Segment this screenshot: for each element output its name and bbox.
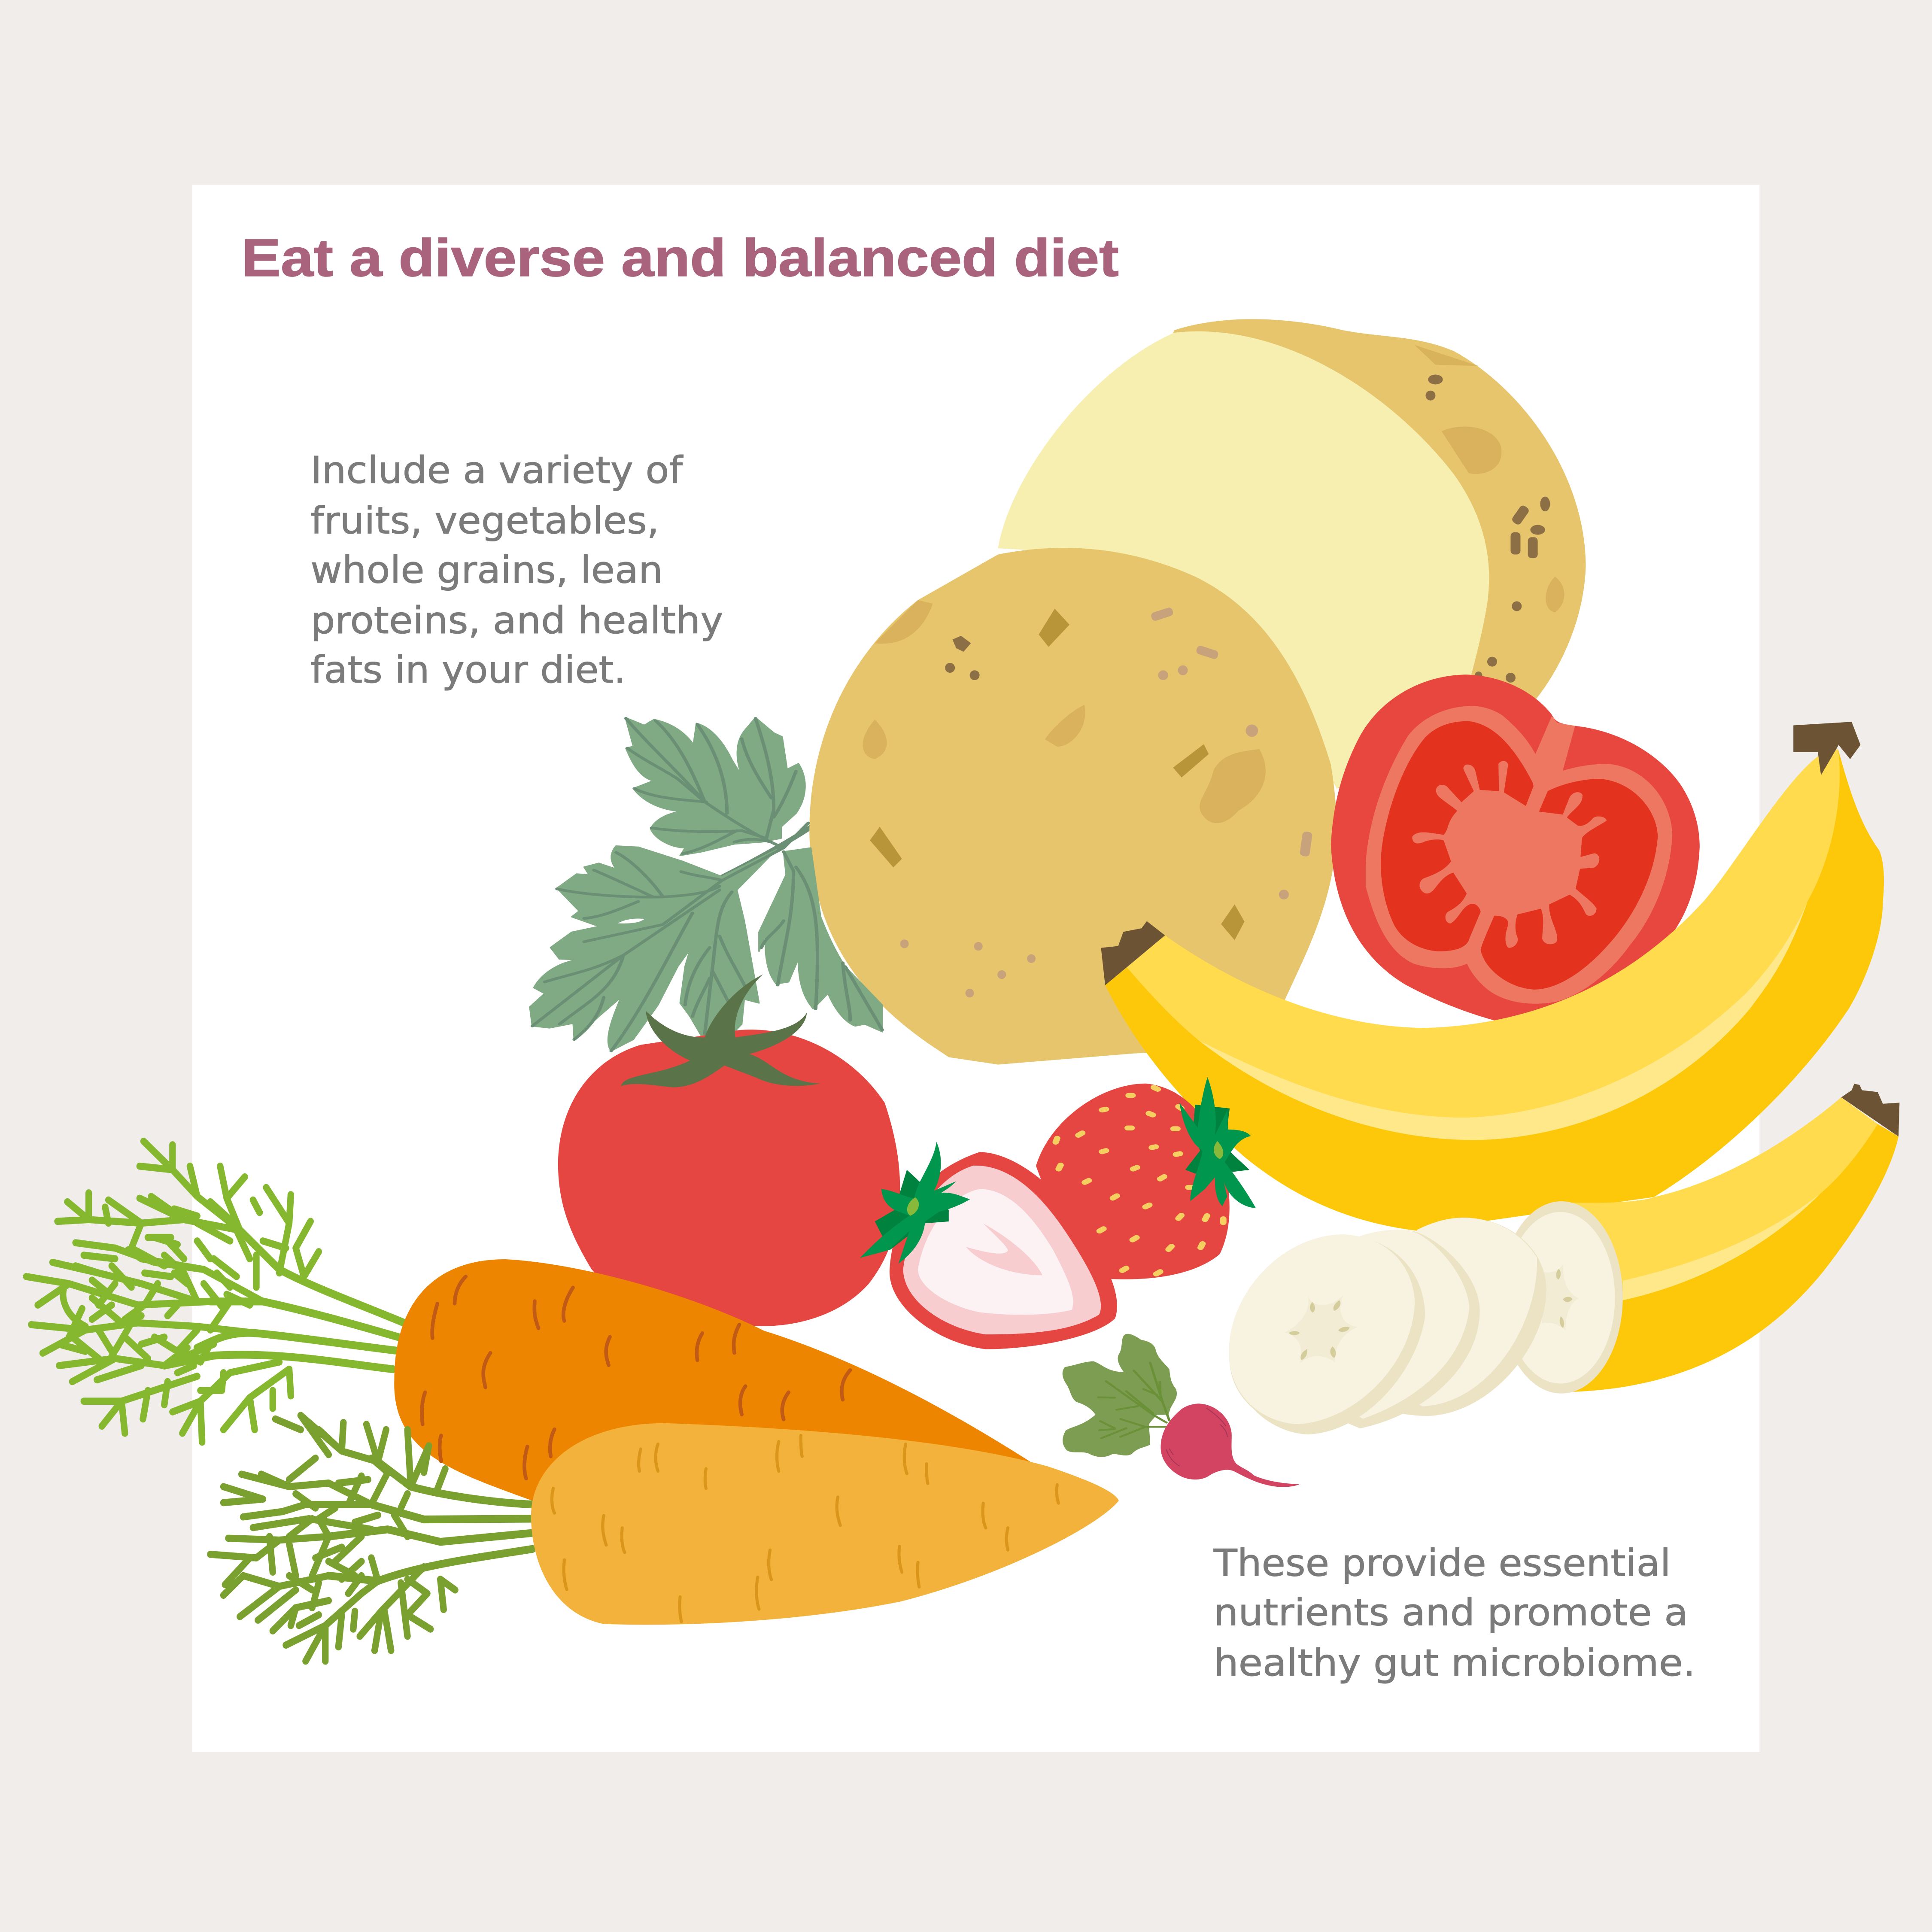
- icon: whole tomato: [558, 974, 900, 1326]
- icon: lower banana: [1565, 1084, 1899, 1392]
- text block: essential nutrients: healthy gut microbiome.: [1214, 1642, 1695, 1685]
- icon: parsley stem: [690, 826, 813, 893]
- icon: large banana: [1101, 722, 1884, 1231]
- text block: variety of foods: proteins, and healthy: [310, 599, 723, 642]
- icon: lower carrot: [531, 1423, 1119, 1625]
- text block: essential nutrients: These provide essential: [1213, 1542, 1671, 1585]
- icon: radish: [1063, 1334, 1300, 1487]
- icon: back potato: [998, 319, 1586, 789]
- text block: variety of foods: fruits, vegetables,: [310, 500, 659, 543]
- title: Eat a diverse and balanced diet: [242, 228, 1119, 288]
- icon: front potato: [809, 548, 1337, 1065]
- text block: variety of foods: Include a variety of: [310, 449, 683, 492]
- icon: parsley leaves: [530, 717, 882, 1051]
- icon: banana slices: [1229, 1201, 1623, 1434]
- icon: top carrot: [394, 1259, 1041, 1501]
- text block: variety of foods: whole grains, lean: [310, 549, 663, 592]
- icon: top carrot greens: [26, 1141, 406, 1442]
- text block: essential nutrients: [1213, 1542, 1695, 1685]
- text block: variety of foods: [310, 449, 723, 692]
- icon: back strawberry: [1036, 1077, 1256, 1279]
- icon: lower carrot greens: [210, 1416, 532, 1661]
- icon: cut strawberry: [860, 1142, 1117, 1349]
- text block: essential nutrients: nutrients and promote a: [1214, 1591, 1688, 1634]
- text block: variety of foods: fats in your diet.: [310, 649, 626, 692]
- icon: half tomato: [1331, 674, 1700, 1021]
